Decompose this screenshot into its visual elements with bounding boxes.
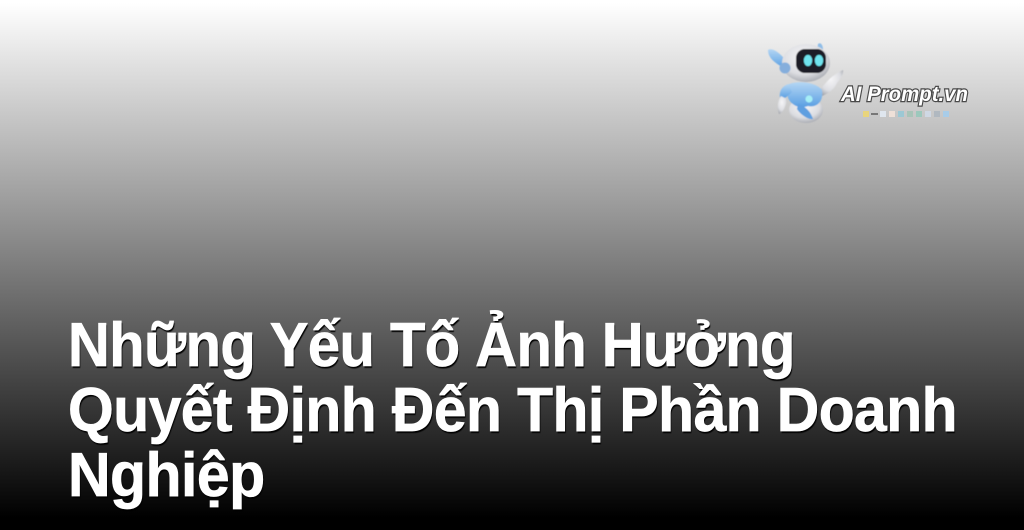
- logo icon strip: [863, 111, 949, 117]
- title: [68, 310, 957, 510]
- logo: AI Prompt.vn: [768, 42, 968, 123]
- title: Nghiệp: [68, 441, 265, 510]
- icon: robot mascot: [768, 43, 843, 123]
- title: Những Yếu Tố Ảnh Hưởng: [68, 311, 795, 380]
- logo wordmark: AI Prompt.vn: [840, 83, 968, 106]
- title: Quyết Định Đến Thị Phần Doanh: [68, 376, 957, 445]
